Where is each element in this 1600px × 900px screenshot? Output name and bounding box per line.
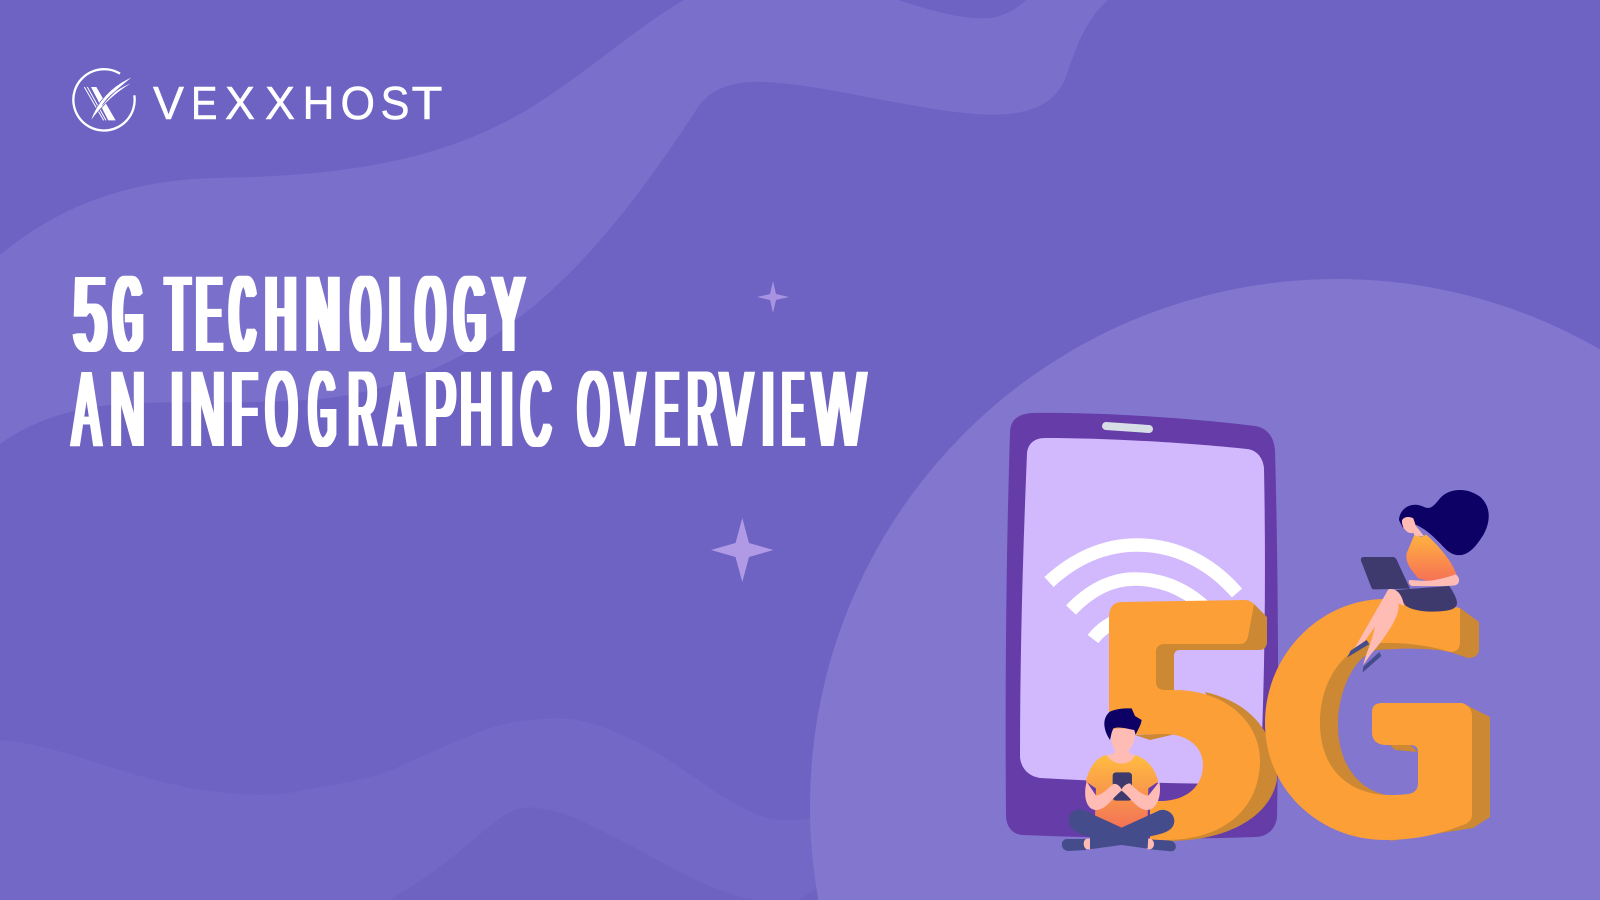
title line 1: E (197, 254, 221, 374)
title line 2: V (616, 349, 644, 469)
phone body (1006, 413, 1278, 838)
logo wordmark: S (380, 77, 410, 129)
boy ankles (1084, 839, 1154, 849)
laptop (1361, 557, 1410, 589)
title line 2: G (309, 349, 336, 469)
woman legs (1354, 589, 1404, 665)
phone screen (1020, 438, 1265, 784)
boy hair (1104, 708, 1142, 740)
woman shoes (1347, 640, 1381, 672)
title line 2: N (110, 349, 145, 469)
boy phone (1113, 772, 1132, 801)
boy legs (1069, 809, 1174, 849)
title line 2: W (813, 349, 866, 469)
title line 2: O (578, 349, 609, 469)
5 front face (1109, 600, 1260, 840)
logo wordmark: E (191, 77, 218, 129)
G numeral (1265, 599, 1490, 841)
boy arms (1085, 782, 1160, 810)
title line 2: H (460, 349, 492, 469)
title line 2: O (266, 349, 297, 469)
title line 2: A (385, 349, 414, 469)
title line 1: N (306, 254, 340, 374)
icon: small sparkle (757, 281, 789, 313)
woman legs and shoes (1347, 589, 1404, 672)
title line 2: F (232, 349, 257, 469)
logo: VEXXHOST (73, 69, 443, 130)
woman shirt (1406, 534, 1457, 583)
5 numeral (1109, 600, 1277, 841)
boy feet (1062, 839, 1176, 851)
boy shirt (1086, 755, 1158, 828)
logo wordmark: V (153, 77, 184, 129)
5 shading (1135, 600, 1277, 841)
title (73, 254, 866, 469)
logo wordmark: X (265, 77, 295, 129)
G front face (1265, 599, 1472, 840)
title line 2: N (190, 349, 225, 469)
woman skirt (1395, 586, 1457, 612)
title line 2: V (721, 349, 752, 469)
woman upper body (1361, 490, 1489, 612)
title line 2: P (425, 349, 456, 469)
title line 2: I (500, 349, 514, 469)
title line 1: 5 (74, 254, 106, 374)
logo wordmark: T (412, 77, 442, 129)
title line 1: O (416, 254, 444, 374)
icon: wifi signal arcs (1049, 545, 1237, 639)
title line 1: G (114, 254, 142, 374)
title: Y (494, 254, 524, 374)
G shading (1310, 608, 1490, 841)
title line 2: E (656, 349, 678, 469)
title line 1: H (266, 254, 296, 374)
title line 1: C (230, 254, 254, 374)
title line 1: T (166, 254, 189, 374)
title line 2: R (688, 349, 717, 469)
decorative big circle backdrop (810, 279, 1600, 900)
title line 2: A (73, 349, 100, 469)
illustration: phone with 5G and people (1006, 413, 1490, 851)
boy neck and face (1107, 728, 1136, 763)
logo wordmark: X (225, 77, 255, 129)
logo wordmark: H (302, 77, 334, 129)
woman face (1402, 517, 1424, 537)
title line 2: I (170, 349, 184, 469)
title line 1: L (390, 254, 408, 374)
title line 1: G (455, 254, 485, 374)
title line 2: C (521, 349, 551, 469)
icon: VEXXHOST emblem (73, 69, 135, 130)
boy with phone (1062, 708, 1176, 851)
title line 2: I (761, 349, 775, 469)
icon: large sparkle (711, 518, 774, 582)
woman with laptop (1347, 490, 1489, 672)
woman arm (1409, 574, 1459, 586)
phone speaker (1106, 426, 1149, 429)
title line 2: E (782, 349, 804, 469)
woman hair (1399, 490, 1489, 555)
logo wordmark: O (340, 77, 375, 129)
title line 2: R (348, 349, 377, 469)
title line 1: O (352, 254, 380, 374)
